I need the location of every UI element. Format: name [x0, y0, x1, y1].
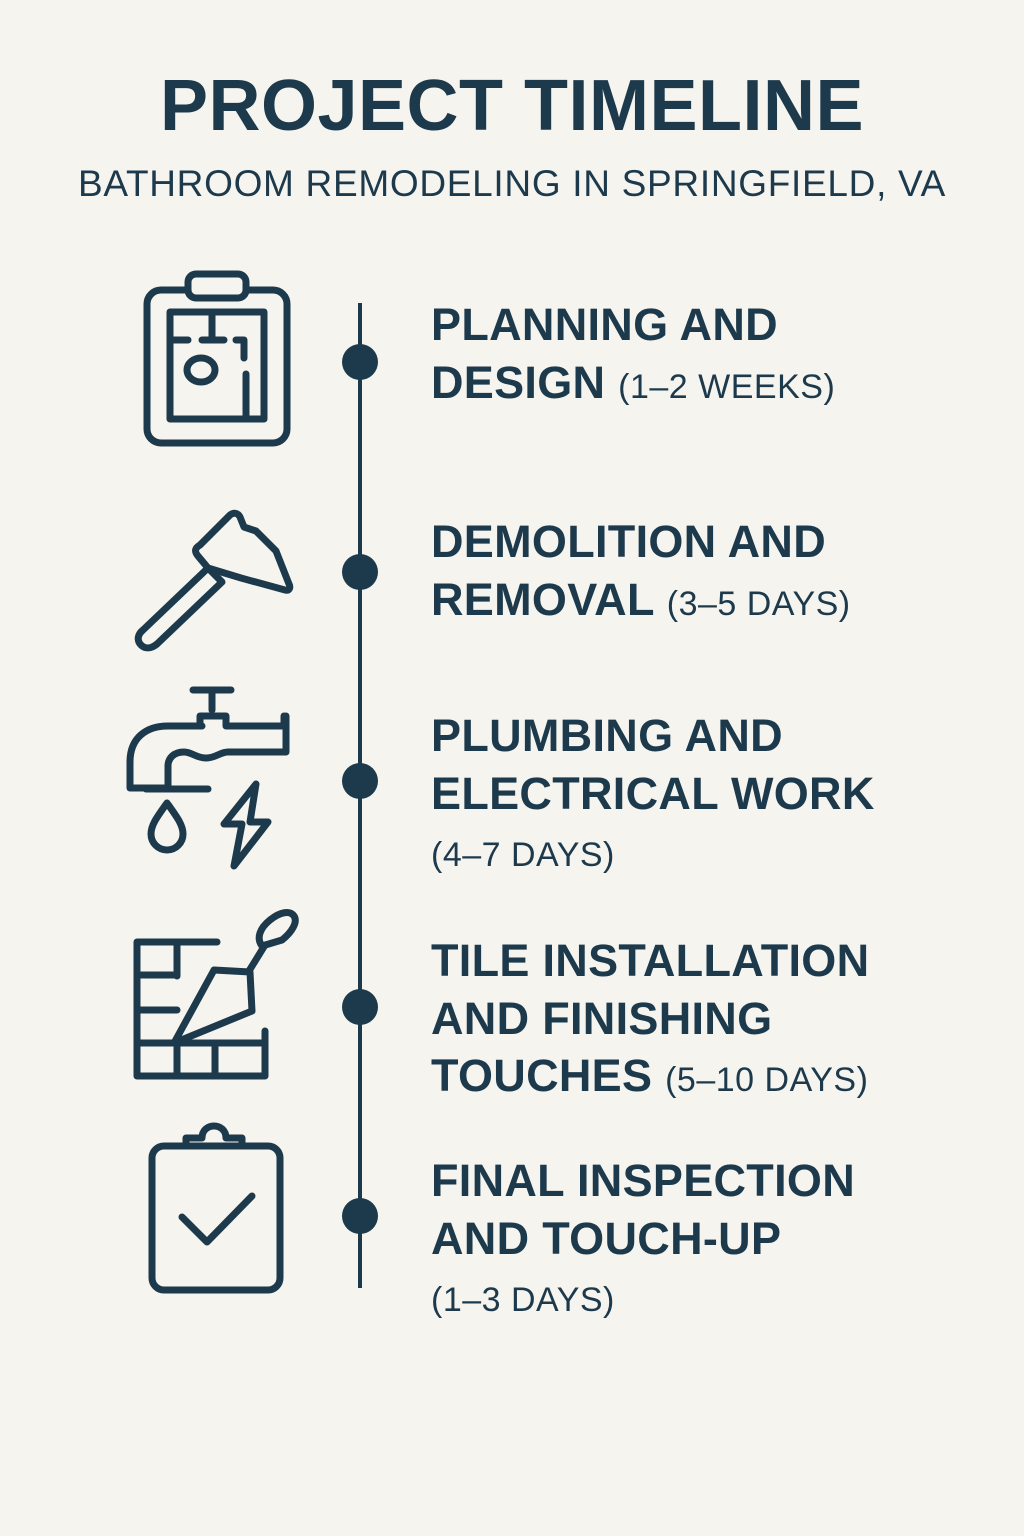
step 3 text: (4–7 DAYS)	[431, 836, 615, 874]
step 4 text: AND FINISHING	[431, 992, 772, 1044]
step 3 text: ELECTRICAL WORK	[431, 768, 875, 818]
step 1 text: PLANNING AND	[431, 299, 778, 350]
subtitle: BATHROOM REMODELING IN SPRINGFIELD, VA	[78, 163, 946, 204]
step 2 text: DEMOLITION AND	[431, 516, 826, 567]
step 4 text: TILE INSTALLATION	[431, 935, 869, 986]
icon: faucet	[130, 690, 286, 866]
step 5 text	[431, 1155, 855, 1319]
step 1 text	[431, 299, 835, 408]
step 4 text: TOUCHES (5–10 DAYS)	[431, 1050, 868, 1101]
step 2 text: REMOVAL (3–5 DAYS)	[431, 574, 851, 624]
step 2 text	[431, 516, 851, 624]
step 5 text: AND TOUCH-UP	[431, 1212, 781, 1264]
title: PROJECT TIMELINE	[160, 66, 864, 146]
icon: tile trowel	[137, 913, 295, 1076]
icon: hammer	[138, 513, 290, 648]
step 1 text: DESIGN (1–2 WEEKS)	[431, 356, 835, 408]
icon: checklist clipboard	[152, 1126, 280, 1290]
step 4 text	[431, 935, 869, 1101]
step 3 text: PLUMBING AND	[431, 710, 783, 761]
step 3 text	[431, 710, 875, 874]
step 5 text: FINAL INSPECTION	[431, 1155, 855, 1206]
step 5 text: (1–3 DAYS)	[431, 1281, 615, 1319]
icon: blueprint clipboard	[147, 274, 287, 443]
